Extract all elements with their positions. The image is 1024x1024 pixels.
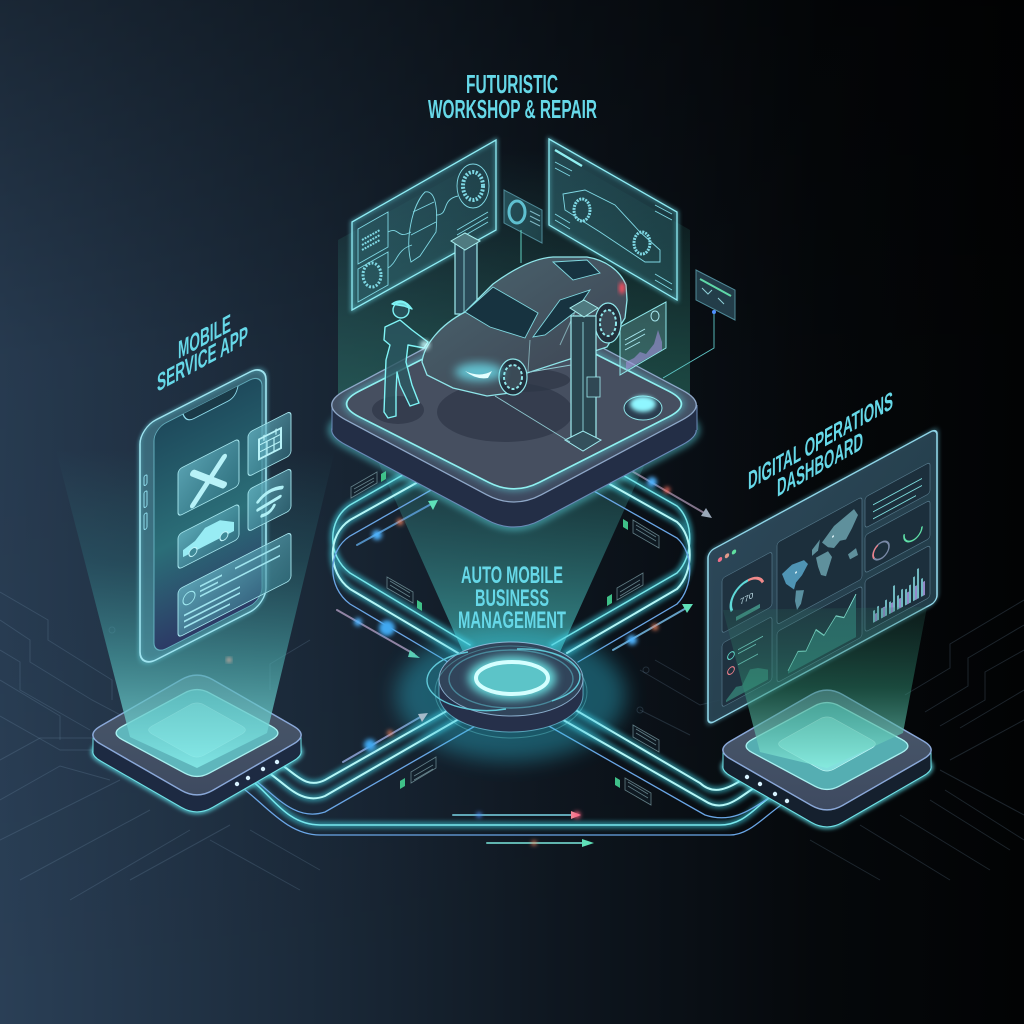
phone glow — [140, 364, 266, 668]
connection lines: hub and platforms — [237, 708, 787, 835]
hub rings — [427, 649, 580, 711]
phone label — [157, 308, 248, 398]
car wheels — [499, 303, 621, 395]
platform connector nodes — [235, 466, 789, 803]
small data tags — [351, 471, 659, 805]
connection lines: workshop to hub — [333, 468, 690, 662]
hub label — [458, 562, 566, 634]
holo panel: chart — [620, 302, 666, 375]
info card — [178, 532, 291, 638]
left platform — [93, 675, 301, 812]
workshop label: WORKSHOP & REPAIR — [428, 94, 597, 124]
phone — [140, 351, 291, 668]
beam: phone projection — [56, 450, 335, 768]
phone notch and side buttons — [144, 386, 238, 530]
calendar card — [248, 411, 291, 477]
area chart card — [777, 586, 862, 683]
front lift pillar — [495, 300, 601, 451]
car body — [422, 257, 627, 396]
car windows — [465, 260, 600, 338]
mini gauges card — [865, 500, 930, 573]
phone screen — [154, 374, 262, 655]
holo panel: donut — [504, 190, 542, 263]
hub label: BUSINESS — [475, 585, 549, 612]
workshop label: FUTURISTIC — [466, 69, 558, 99]
circuit traces left — [0, 592, 320, 900]
dashboard label: DIGITAL OPERATIONS — [748, 386, 893, 496]
data streak arrows — [337, 470, 712, 847]
phone body — [140, 364, 266, 668]
phone label: SERVICE APP — [157, 320, 248, 398]
bar chart card — [865, 545, 930, 632]
car — [422, 257, 627, 396]
workshop platform — [332, 308, 697, 527]
holo panel: car top view — [352, 140, 496, 310]
hub label: MANAGEMENT — [458, 607, 566, 634]
dashboard label — [748, 386, 893, 503]
phone label: MOBILE — [178, 308, 231, 365]
headlight — [455, 363, 503, 381]
workshop label — [428, 69, 597, 124]
sliders card — [865, 462, 930, 528]
back lift pillar — [451, 233, 480, 314]
dashboard glow — [708, 428, 937, 725]
tail light — [619, 282, 625, 294]
dashboard — [708, 428, 937, 725]
beam: central hub projection — [375, 455, 649, 652]
status card — [722, 616, 772, 707]
window buttons — [718, 549, 736, 563]
holo panel: small readout — [663, 270, 735, 378]
car card — [178, 504, 239, 570]
dashboard frame — [708, 428, 937, 725]
gauge card: 770 — [740, 590, 754, 607]
map card — [777, 497, 862, 625]
beam: dashboard projection — [723, 607, 927, 768]
right platform — [723, 690, 931, 827]
gauge card — [722, 551, 772, 633]
holo panel: car side view — [549, 139, 677, 300]
technician — [384, 301, 430, 418]
hub base — [435, 642, 587, 738]
hub label: AUTO MOBILE — [461, 562, 563, 589]
workshop beacon — [624, 396, 662, 420]
workshop hologram backdrop — [338, 150, 690, 500]
hub glowing centre — [468, 656, 556, 700]
handshake card — [248, 468, 291, 532]
tools card — [178, 439, 239, 517]
central hub — [396, 629, 626, 761]
car door line — [528, 312, 575, 372]
circuit traces right — [637, 600, 1024, 880]
stray light — [226, 658, 232, 662]
dashboard label: DASHBOARD — [777, 426, 863, 503]
